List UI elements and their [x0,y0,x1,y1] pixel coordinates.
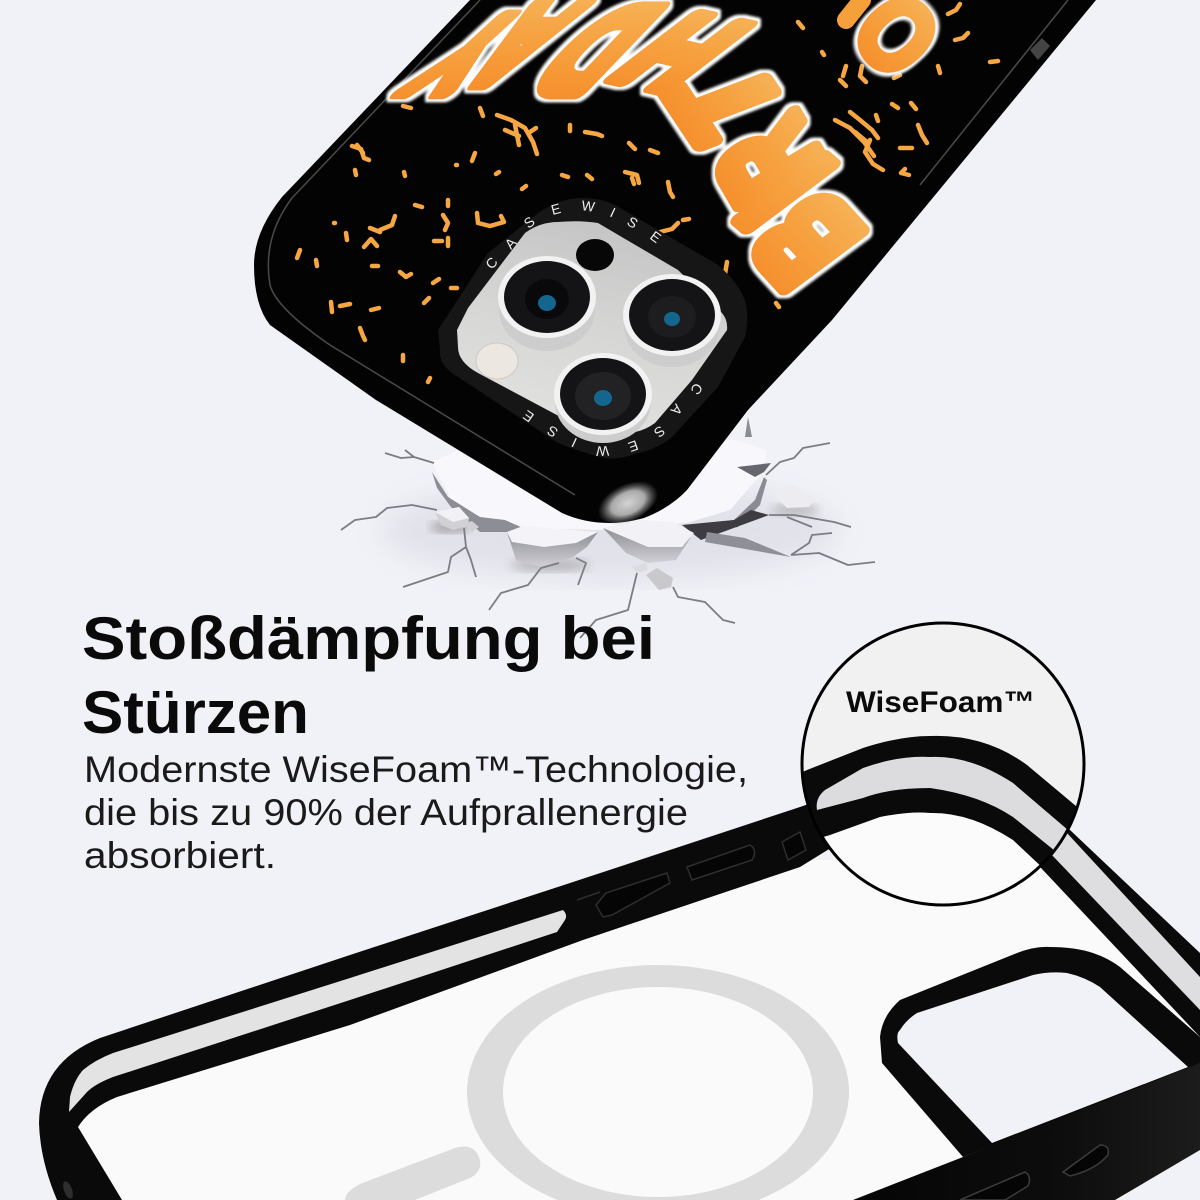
brand text upper: CASEWISE [482,197,664,272]
white gap line on right [1040,867,1200,1040]
clear back plate [70,860,1200,1200]
bottom clear case [39,786,1200,1200]
camera cutout [880,947,1200,1157]
letter B: B [721,170,889,311]
brand text lower: CASEWISE [520,380,706,459]
magnified foam strip [817,757,1075,855]
case edge highlights [268,0,1068,495]
camera window [457,221,727,433]
hole in lower left corner [61,1180,75,1200]
island bezel [438,198,747,458]
callout label: WiseFoam™ [846,686,1035,719]
case body [254,0,1096,523]
magnetic ring [467,965,849,1200]
heading [82,605,655,746]
camera island [438,197,747,459]
magnifier background [800,620,1090,910]
lower right black band [853,1063,1200,1200]
magnified back plate [824,812,1040,904]
magnified black frame [804,736,1076,865]
foam strip upper left [69,910,566,1112]
lens top left [498,256,596,351]
lens right [623,274,721,367]
body line two: die bis zu 90% der Aufprallenergie [84,792,688,833]
body text [84,749,748,876]
orange speckles [297,4,998,382]
microphone hole [576,239,614,271]
outer black frame [39,786,1200,1200]
magnetic ring stem [345,1146,480,1200]
second-word stroke fragment [846,0,862,20]
heading line one: Stoßdämpfung bei [82,605,655,672]
orange wavy lettering [373,0,889,311]
foam strip right [1045,833,1200,1010]
letter I: I [709,134,863,251]
body line three: absorbiert. [84,835,276,876]
side button [1030,38,1050,60]
heading line two: Stürzen [82,679,309,746]
callout circle ring [802,623,1084,905]
letter T: T [637,48,814,157]
top phone in black case [254,0,1096,534]
letter R: R [688,95,847,225]
volume buttons [577,832,806,917]
flash [476,343,518,379]
corner shine [599,482,657,524]
camera cutout opening [897,972,1188,1143]
cracked ground impact [341,417,875,638]
body line one: Modernste WiseFoam™-Technologie, [84,749,748,790]
lower right port details [960,1145,1108,1200]
lens bottom [554,353,652,443]
callout magnifier detail [804,736,1076,866]
